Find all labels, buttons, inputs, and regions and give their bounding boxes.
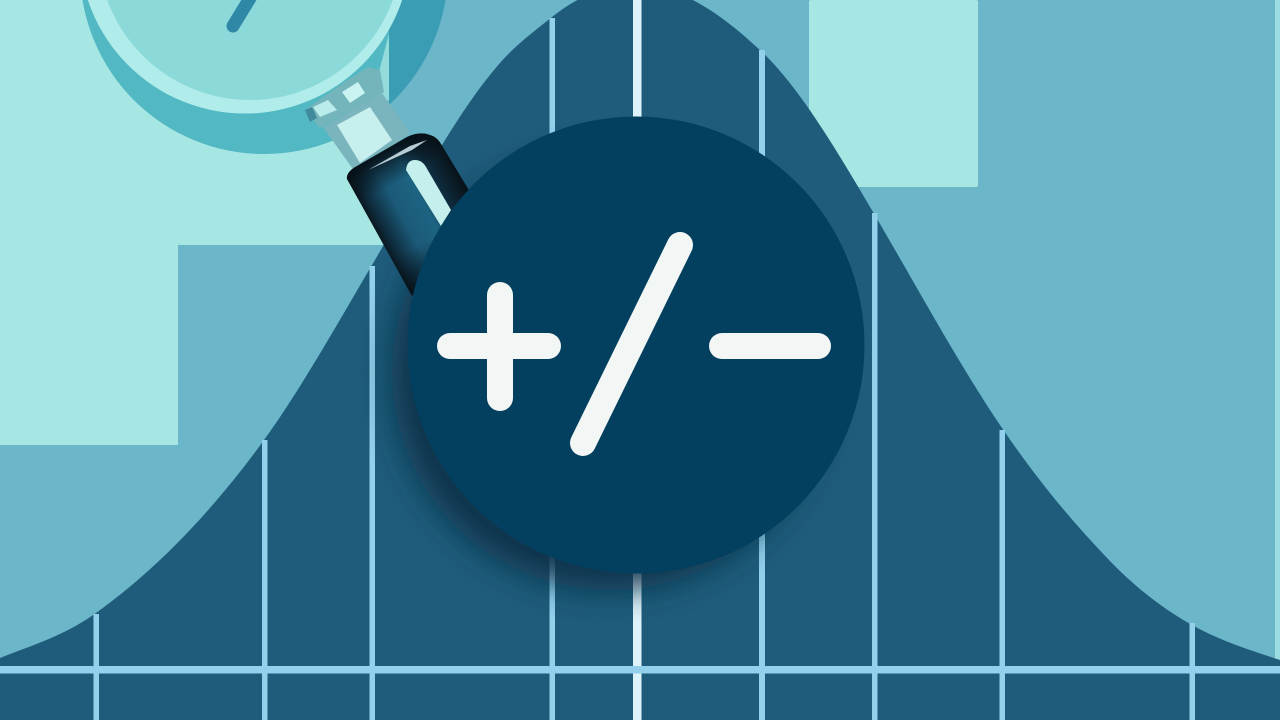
slash [583, 245, 680, 443]
background block: right light rectangle [809, 0, 978, 187]
plus/minus badge [408, 116, 864, 574]
lens drop shadow [80, 0, 448, 154]
lens glass [98, 0, 402, 100]
lens needle [233, 0, 255, 26]
grip slot [406, 160, 451, 226]
badge disc [408, 116, 864, 574]
icon: magnifying glass [80, 0, 470, 296]
handle glass neck [323, 93, 410, 172]
grip highlight [368, 140, 427, 170]
handle collar [305, 67, 384, 128]
badge shadow [392, 154, 828, 590]
right edge highlight [1275, 0, 1280, 660]
background block: left light stepped shape [0, 0, 389, 445]
plus sign [437, 282, 561, 411]
lens rim [80, 0, 410, 114]
minus sign [709, 333, 831, 359]
handle grip [347, 133, 470, 296]
